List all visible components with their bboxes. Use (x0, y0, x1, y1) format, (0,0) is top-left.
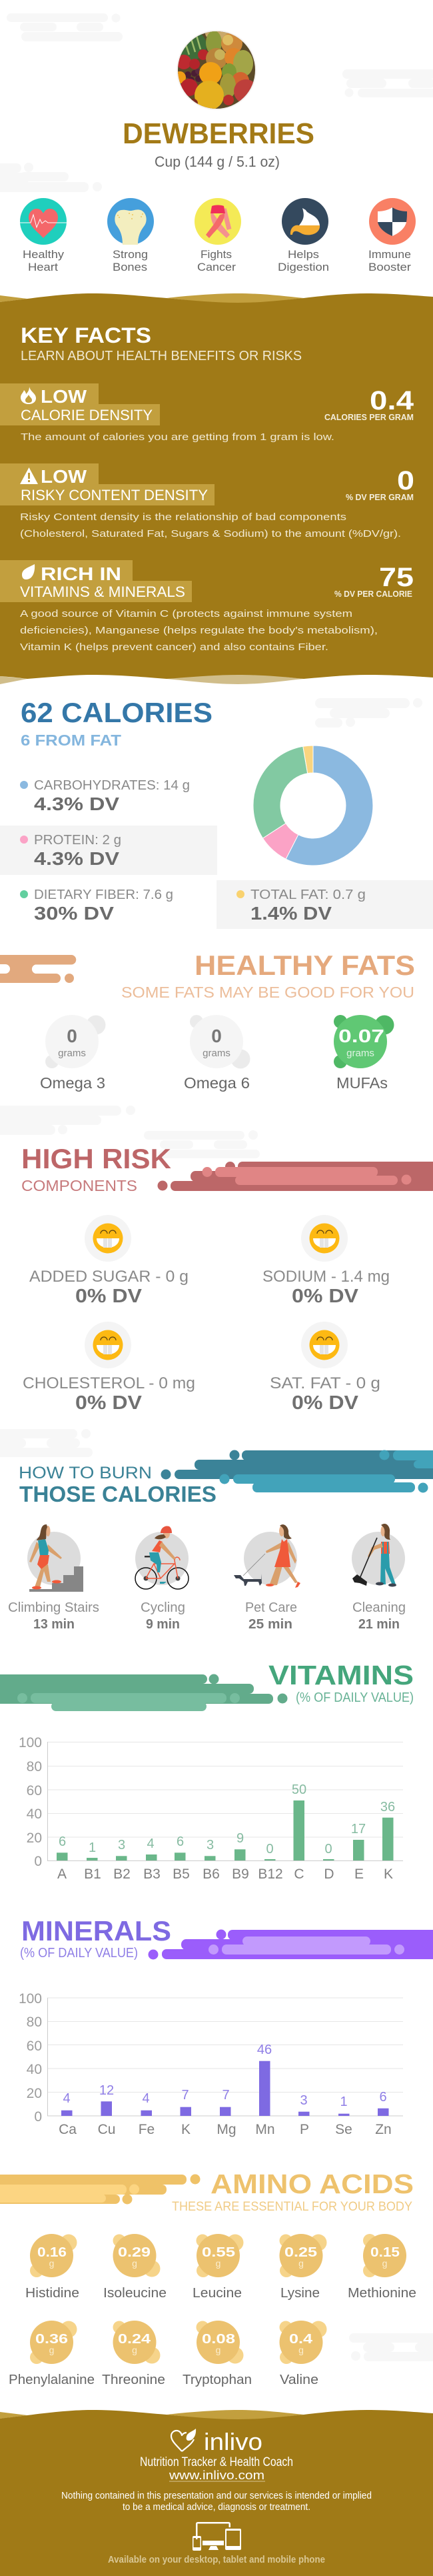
omega 3: grams (58, 1048, 86, 1059)
fact: risky content density: 0 (397, 466, 414, 495)
amino: isoleucine: 0.29 (118, 2245, 151, 2260)
amino: histidine: Histidine (25, 2286, 79, 2301)
amino: valine: 0.4 (289, 2332, 313, 2347)
bar chart: minerals: K (181, 2122, 191, 2137)
subheading: components: COMPONENTS (21, 1177, 137, 1194)
bar chart: vitamins: 50 (292, 1782, 306, 1797)
bar chart: vitamins: 3 (207, 1838, 214, 1852)
amino: histidine: g (49, 2258, 54, 2269)
component: added sugar: 0% DV (75, 1286, 143, 1307)
omega 6 (184, 1015, 250, 1092)
amino: threonine (102, 2321, 165, 2387)
macro: total fat: 1.4% DV (250, 903, 332, 924)
panel: healthy fats (0, 950, 415, 1092)
bar chart: vitamins: 40 (27, 1806, 42, 1822)
decorative bars: burn (161, 1450, 433, 1492)
bar chart: minerals: 0 (34, 2109, 42, 2125)
heading: minerals: MINERALS (21, 1915, 171, 1947)
bar chart: vitamins: 9 (236, 1831, 244, 1846)
heading: vitamins: VITAMINS (268, 1660, 414, 1690)
panel: calories (0, 697, 433, 929)
amino: leucine: 0.55 (202, 2245, 235, 2260)
panel: amino acids (0, 2169, 416, 2387)
macro: protein (0, 826, 217, 875)
fact: rich in vitamins and minerals: A good source of Vitamin C (protects against immune system (20, 608, 352, 619)
icon: strong bones: Bones (113, 261, 147, 273)
bar chart: vitamins: 1 (89, 1840, 96, 1855)
activity: pet care: 25 min (248, 1617, 292, 1632)
bar chart: minerals: Fe (139, 2122, 155, 2137)
activity: cycling (135, 1526, 189, 1632)
decorative bars: vitamins (0, 1674, 288, 1711)
bar chart: vitamins: B5 (173, 1866, 190, 1882)
decorative bars: healthy fats (0, 955, 76, 983)
disclaimer (61, 2491, 372, 2513)
icon: immune booster: Booster (368, 261, 411, 273)
activity: cycling: Cycling (141, 1600, 185, 1615)
heading: how to burn: HOW TO BURN (19, 1464, 152, 1482)
bar chart: minerals: 3 (300, 2093, 308, 2108)
decorative bars: amino acids (0, 2174, 200, 2205)
icon: helps digestion: Digestion (278, 261, 329, 273)
subheading: daily value: (% OF DAILY VALUE) (20, 1946, 138, 1961)
amino: valine: g (298, 2345, 304, 2355)
amino: lysine: Lysine (280, 2286, 320, 2301)
bar chart: minerals: 46 (257, 2043, 272, 2057)
bar chart: vitamins: 20 (27, 1830, 42, 1846)
panel: key facts (0, 293, 433, 684)
fact: rich in vitamins and minerals (0, 560, 414, 653)
bar chart: vitamins: 80 (27, 1759, 42, 1774)
bar chart: vitamins: C (294, 1866, 304, 1882)
icon: healthy heart: Heart (28, 261, 58, 273)
component: saturated fat: SAT. FAT - 0 g (270, 1374, 380, 1392)
omega 3 (40, 1015, 105, 1092)
panel: vitamins (0, 1660, 414, 1882)
disclaimer: to be a medical advice, diagnosis or treatment. (123, 2502, 310, 2513)
amino: leucine: g (216, 2258, 220, 2269)
decorative bars: high risk (157, 1162, 433, 1191)
activity: cleaning: 21 min (358, 1617, 400, 1632)
subheading: from fat: 6 FROM FAT (21, 732, 121, 749)
component: added sugar: ADDED SUGAR - 0 g (29, 1268, 189, 1286)
component: sodium: 0% DV (292, 1286, 359, 1307)
component: added sugar (29, 1215, 189, 1307)
decorative bars: minerals (148, 1930, 433, 1959)
logo: inlivo: inlivo (204, 2428, 262, 2455)
icon: healthy heart: Healthy (23, 248, 65, 261)
component: cholesterol (23, 1322, 195, 1414)
amino: tryptophan: Tryptophan (183, 2373, 252, 2387)
fact: calorie density: The amount of calories you are getting from 1 gram is low. (21, 431, 334, 443)
bar chart: minerals: Mg (217, 2122, 236, 2137)
macro: carbohydrates (20, 778, 190, 814)
donut chart (253, 746, 373, 866)
bar chart: minerals: Se (335, 2122, 352, 2137)
fact: rich in vitamins and minerals: Vitamin K (helps prevent cancer) and also contains Fiber. (20, 641, 328, 653)
bar chart: minerals: Ca (59, 2122, 77, 2137)
panel: how to burn calories (8, 1450, 433, 1632)
icon: healthy heart (20, 198, 67, 273)
heading: amino acids: AMINO ACIDS (211, 2169, 414, 2199)
component: saturated fat: 0% DV (292, 1392, 359, 1414)
fact: rich in vitamins and minerals: 75 (379, 563, 414, 592)
title: DEWBERRIES (123, 117, 314, 150)
amino: lysine: g (298, 2258, 304, 2269)
website: www.inlivo.com (169, 2469, 264, 2482)
icon: immune booster: Immune (368, 248, 411, 261)
fact: rich in vitamins and minerals: deficiencies), Manganese (helps regulate the body's metabolism), (20, 625, 378, 636)
heading: calories: 62 CALORIES (21, 697, 213, 728)
macro: total fat: TOTAL FAT: 0.7 g (250, 888, 366, 902)
bar chart: minerals: 40 (27, 2062, 42, 2077)
bar chart: vitamins: 4 (147, 1836, 155, 1851)
amino: methionine: 0.15 (370, 2245, 400, 2260)
macro: total fat (217, 880, 433, 929)
amino: tryptophan: g (216, 2345, 220, 2355)
subheading: daily value: (% OF DAILY VALUE) (296, 1690, 414, 1705)
bar chart: vitamins: 6 (177, 1834, 184, 1849)
bar chart: minerals: 1 (340, 2095, 348, 2109)
icon: fights cancer: Cancer (197, 261, 236, 273)
amino: lysine: 0.25 (284, 2245, 317, 2260)
fact: calorie density: CALORIES PER GRAM (324, 413, 414, 422)
fact: risky content density: RISKY CONTENT DENSITY (21, 487, 208, 503)
bar chart: vitamins: 36 (380, 1800, 395, 1814)
mufas: MUFAs (336, 1074, 388, 1092)
amino: threonine: Threonine (102, 2373, 165, 2387)
icon: fights cancer (195, 198, 241, 273)
bar chart: vitamins: 6 (59, 1834, 66, 1849)
macro: carbohydrates: CARBOHYDRATES: 14 g (34, 778, 190, 793)
bar chart: vitamins: 3 (118, 1838, 125, 1852)
bar chart: minerals: Mn (255, 2122, 275, 2137)
fact: calorie density (0, 383, 414, 443)
icon: strong bones (107, 198, 154, 273)
icon: immune booster (368, 198, 416, 273)
bar chart: vitamins: 0 (324, 1842, 332, 1856)
bar chart: minerals: 7 (222, 2088, 230, 2103)
fact: calorie density: CALORIE DENSITY (21, 407, 153, 423)
mufas: 0.07 (338, 1026, 384, 1046)
macro: protein: PROTEIN: 2 g (34, 833, 121, 848)
activity: pet care: Pet Care (245, 1600, 297, 1615)
bar chart: vitamins: B3 (143, 1866, 161, 1882)
omega 3: Omega 3 (40, 1074, 105, 1092)
amino: phenylalanine: 0.36 (35, 2332, 68, 2347)
bar chart: vitamins: B2 (113, 1866, 131, 1882)
amino: lysine (280, 2234, 326, 2301)
heading: key facts: KEY FACTS (21, 323, 151, 347)
disclaimer: Nothing contained in this presentation and our services is intended or implied (61, 2491, 372, 2501)
omega 3: 0 (67, 1026, 77, 1046)
activity: cleaning (352, 1524, 406, 1632)
bar chart: minerals: 4 (63, 2091, 71, 2106)
amino: tryptophan (183, 2321, 252, 2387)
bar chart: minerals: Zn (375, 2122, 392, 2137)
fact: risky content density: % DV PER GRAM (346, 493, 414, 502)
amino: isoleucine: Isoleucine (103, 2286, 167, 2301)
bar chart: vitamins: B9 (232, 1866, 249, 1882)
activity: climbing stairs (8, 1524, 99, 1632)
bar chart: minerals: 80 (27, 2015, 42, 2030)
bar chart: minerals: 4 (142, 2091, 150, 2106)
macro: protein: 4.3% DV (34, 848, 119, 869)
amino: phenylalanine: Phenylalanine (9, 2373, 95, 2387)
icon: helps digestion: Helps (288, 248, 319, 261)
bar chart: vitamins: D (324, 1866, 334, 1882)
fact: risky content density: Risky Content density is the relationship of bad components (20, 511, 346, 523)
icon: devices (193, 2522, 241, 2551)
macro: dietary fiber: 30% DV (34, 903, 114, 924)
header: food photo (177, 30, 256, 110)
amino: methionine: g (382, 2258, 387, 2269)
amino: phenylalanine: g (49, 2345, 54, 2355)
fact: calorie density: LOW (41, 386, 87, 407)
icon: helps digestion (278, 198, 329, 273)
bar chart: minerals: 20 (27, 2086, 42, 2101)
amino: methionine: Methionine (348, 2286, 416, 2301)
subheading: SOME FATS MAY BE GOOD FOR YOU (121, 984, 414, 1001)
panel: footer (0, 2410, 433, 2576)
amino: methionine (348, 2234, 416, 2301)
bar chart: vitamins: B12 (258, 1866, 283, 1882)
benefit icons row (20, 198, 416, 273)
fact: rich in vitamins and minerals: RICH IN (41, 563, 121, 584)
amino: histidine (25, 2234, 79, 2301)
bar chart: vitamins: 60 (27, 1783, 42, 1798)
bar chart: vitamins: E (354, 1866, 364, 1882)
macro: dietary fiber: DIETARY FIBER: 7.6 g (34, 888, 173, 902)
bar chart: minerals: 12 (99, 2083, 114, 2098)
bar chart: minerals: 60 (27, 2039, 42, 2054)
component: cholesterol: CHOLESTEROL - 0 mg (23, 1374, 195, 1392)
bar chart: vitamins: B6 (203, 1866, 220, 1882)
bar chart: vitamins: B1 (84, 1866, 101, 1882)
omega 6: 0 (211, 1026, 222, 1046)
bar chart: vitamins (19, 1735, 403, 1882)
component: sodium: SODIUM - 1.4 mg (262, 1268, 390, 1286)
bar chart: vitamins: 0 (266, 1842, 274, 1856)
macro: dietary fiber (20, 888, 173, 924)
amino: leucine: Leucine (193, 2286, 242, 2301)
amino: isoleucine (103, 2234, 167, 2301)
bar chart: vitamins: 17 (351, 1822, 366, 1836)
component: saturated fat (270, 1322, 380, 1414)
bar chart: vitamins: A (57, 1866, 67, 1882)
amino: threonine: 0.24 (118, 2332, 151, 2347)
omega 6: Omega 6 (184, 1074, 250, 1092)
bar chart: minerals: Cu (98, 2122, 115, 2137)
omega 6: grams (203, 1048, 230, 1059)
mufas: grams (346, 1048, 374, 1059)
fact: risky content density: LOW (41, 466, 87, 487)
heading: healthy fats: HEALTHY FATS (195, 950, 415, 981)
heading: high risk: HIGH RISK (21, 1143, 171, 1174)
heading: those calories: THOSE CALORIES (19, 1482, 217, 1506)
panel: minerals (19, 1915, 433, 2137)
component: cholesterol: 0% DV (75, 1392, 143, 1414)
activity: climbing stairs: 13 min (33, 1617, 75, 1632)
bar chart: minerals: 6 (379, 2090, 387, 2105)
fact: risky content density: (Cholesterol, Saturated Fat, Sugars & Sodium) to the amount (%DV/gr). (20, 528, 401, 539)
fact: calorie density: 0.4 (370, 386, 414, 415)
bar chart: minerals: 7 (181, 2088, 189, 2103)
panel: high risk components (21, 1143, 433, 1414)
fact: rich in vitamins and minerals: VITAMINS & MINERALS (20, 583, 185, 600)
activity: climbing stairs: Climbing Stairs (8, 1600, 99, 1615)
amino: leucine (193, 2234, 244, 2301)
amino: isoleucine: g (132, 2258, 137, 2269)
amino: valine: Valine (280, 2373, 318, 2387)
icon: strong bones: Strong (113, 248, 148, 261)
mufas (334, 1015, 394, 1092)
availability note: Available on your desktop, tablet and mobile phone (108, 2554, 325, 2565)
macro: carbohydrates: 4.3% DV (34, 794, 119, 814)
activity: cleaning: Cleaning (352, 1600, 406, 1615)
bar chart: vitamins: 100 (19, 1735, 42, 1750)
amino: histidine: 0.16 (37, 2245, 67, 2260)
tagline: Nutrition Tracker & Health Coach (140, 2455, 293, 2469)
activity: cycling: 9 min (146, 1617, 180, 1632)
component: sodium (262, 1215, 390, 1307)
subheading: THESE ARE ESSENTIAL FOR YOUR BODY (172, 2200, 412, 2214)
icon: fights cancer: Fights (201, 248, 232, 261)
bar chart: vitamins: 0 (34, 1854, 42, 1869)
subheading: LEARN ABOUT HEALTH BENEFITS OR RISKS (21, 349, 302, 363)
amino: threonine: g (132, 2345, 137, 2355)
bar chart: minerals (19, 1991, 403, 2137)
amino: phenylalanine (9, 2321, 95, 2387)
bar chart: minerals: P (300, 2122, 309, 2137)
fact: risky content density (0, 463, 414, 539)
bar chart: minerals: 100 (19, 1991, 42, 2007)
amino: tryptophan: 0.08 (202, 2332, 235, 2347)
activity: pet care (234, 1524, 300, 1632)
amino: valine (280, 2321, 326, 2387)
logo: inlivo (171, 2428, 262, 2455)
fact: rich in vitamins and minerals: % DV PER CALORIE (334, 589, 412, 599)
bar chart: vitamins: K (384, 1866, 393, 1882)
serving size: Cup (144 g / 5.1 oz) (155, 153, 280, 170)
